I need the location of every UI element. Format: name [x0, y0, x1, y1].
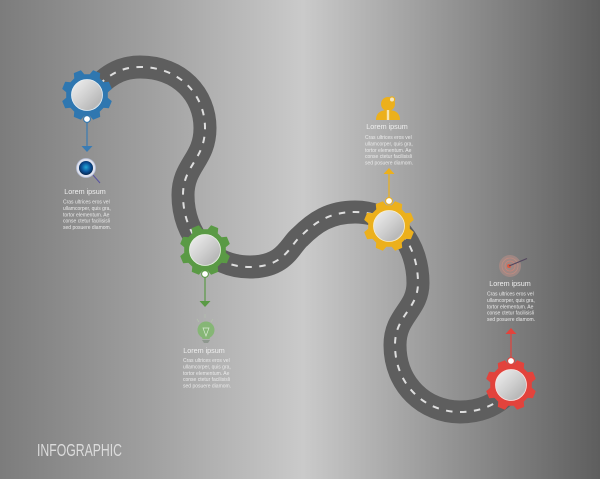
text block: red	[487, 279, 535, 323]
icon: target	[499, 255, 527, 277]
text block: yellow: Cras ultrices eros vel	[365, 135, 412, 141]
text block: green: tortor elementum. Ae	[183, 371, 230, 377]
text block: red: ullamcorper, quis gra,	[487, 298, 535, 304]
text block: green: sed posuere diamom.	[183, 384, 231, 390]
gear: yellow	[365, 202, 413, 250]
text block: yellow: ullamcorper, quis gra,	[365, 142, 413, 148]
text block: yellow: sed posuere diamom.	[365, 160, 413, 166]
text block: red: sed posuere diamom.	[487, 317, 535, 323]
text block: blue: Cras ultrices eros vel	[63, 200, 110, 206]
text block: red: Cras ultrices eros vel	[487, 292, 534, 298]
gear: red	[487, 361, 535, 409]
arrow: green	[200, 271, 210, 307]
title: INFOGRAPHIC	[37, 440, 122, 460]
text block: yellow: Lorem ipsum	[366, 122, 408, 131]
text block: green	[183, 346, 231, 390]
text block: blue: tortor elementum. Ae	[63, 212, 110, 218]
text block: yellow: tortor elementum. Ae	[365, 148, 412, 154]
arrow: yellow	[384, 168, 394, 204]
winding road	[90, 67, 510, 412]
text block: blue: Lorem ipsum	[64, 187, 106, 196]
icon: magnifier	[76, 158, 100, 183]
icon: businessman	[376, 97, 400, 120]
text block: blue: sed posuere diamom.	[63, 225, 111, 231]
gear: blue	[63, 71, 111, 119]
text block: yellow	[365, 122, 413, 166]
text block: green: Cras ultrices eros vel	[183, 358, 230, 364]
text block: red: tortor elementum. Ae	[487, 304, 534, 310]
text block: red: conse ctetur facilisisli	[487, 310, 534, 316]
icon: light bulb	[197, 314, 214, 343]
text block: green: Lorem ipsum	[183, 346, 225, 355]
arrow: blue	[82, 116, 92, 152]
gear: green	[181, 226, 229, 274]
text block: blue: ullamcorper, quis gra,	[63, 206, 111, 212]
text block: yellow: conse ctetur facilisisli	[365, 154, 412, 160]
text block: green: ullamcorper, quis gra,	[183, 364, 231, 370]
text block: green: conse ctetur facilisisli	[183, 377, 230, 383]
text block: blue	[63, 187, 111, 231]
arrow: red	[506, 328, 516, 364]
text block: blue: conse ctetur facilisisli	[63, 218, 110, 224]
text block: red: Lorem ipsum	[489, 279, 531, 288]
